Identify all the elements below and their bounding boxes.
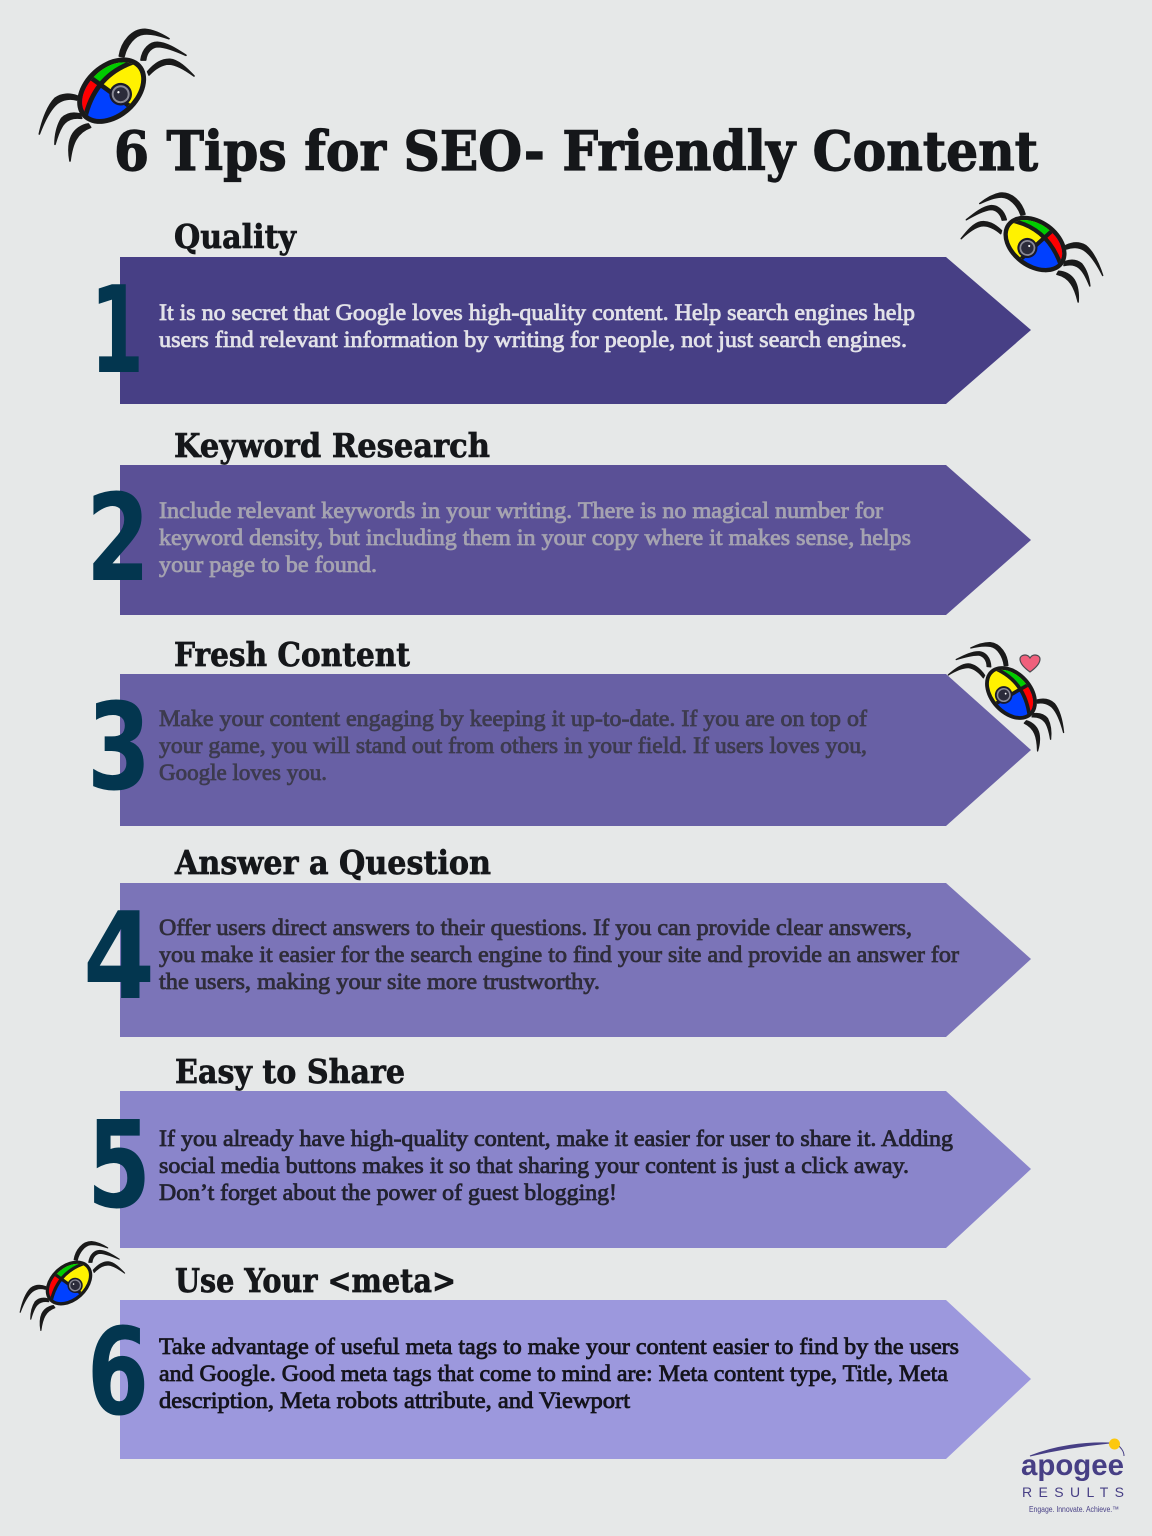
logo: apogee results: apogee (1021, 1449, 1124, 1482)
logo: apogee results: RESULTS (1022, 1484, 1124, 1500)
panel 4: Answer a Question (83, 883, 1031, 1037)
panel 1: Quality: It is no secret that Google loves high-quality content. Help search engines help (159, 300, 915, 326)
heading: Keyword Research: Keyword Research (174, 426, 490, 465)
panel 6: Use Your meta: and Google. Good meta tags that come to mind are: Meta content type, Title, Meta (159, 1361, 949, 1387)
panel 3: Fresh Content: Google loves you. (159, 760, 327, 786)
panel 4: Answer a Question: Offer users direct answers to their questions. If you can provide clear answers, (159, 915, 912, 941)
panel 6: Use Your meta: description, Meta robots attribute, and Viewport (159, 1388, 630, 1414)
heading: Quality: Quality (174, 217, 297, 256)
panel 4: Answer a Question: the users, making your site more trustworthy. (159, 969, 600, 995)
icon: spider bug top left (39, 29, 194, 161)
panel 1: Quality: users find relevant information by writing for people, not just search engines. (159, 327, 907, 353)
panel 3: Fresh Content: Make your content engaging by keeping it up-to-date. If you are on top of (159, 706, 867, 732)
panel 6: Use Your meta (87, 1300, 1031, 1459)
heading: Answer a Question: Answer a Question (174, 843, 491, 882)
heading: Use Your meta: Use Your <meta> (175, 1261, 456, 1300)
icon: spider bug top right (957, 183, 1105, 314)
panel 2: Keyword Research: 2 (86, 470, 150, 609)
panel 3: Fresh Content (87, 674, 1031, 826)
logo: apogee results (1021, 1438, 1124, 1514)
icon: spider bug lower left (20, 1242, 125, 1330)
panel 1: Quality: 1 (90, 262, 144, 401)
panel 5: Easy to Share: 5 (87, 1097, 151, 1236)
heading: Fresh Content: Fresh Content (174, 635, 411, 674)
icon: spider bug with heart (941, 639, 1072, 753)
panel 5: Easy to Share: If you already have high-quality content, make it easier for user to share it. Adding (159, 1126, 953, 1152)
logo: apogee results: Engage. Innovate. Achieve.™ (1029, 1505, 1119, 1514)
panel 5: Easy to Share: social media buttons makes it so that sharing your content is just a click away. (159, 1153, 909, 1179)
panel 3: Fresh Content: 3 (87, 679, 151, 818)
title: 6 Tips for SEO- Friendly Content (114, 119, 1038, 183)
panel 4: Answer a Question: you make it easier for the search engine to find your site and provide an answer for (159, 942, 959, 968)
panel 6: Use Your meta: Take advantage of useful meta tags to make your content easier to find by the users (159, 1334, 959, 1360)
panel 2: Keyword Research: keyword density, but including them in your copy where it makes sense, helps (159, 525, 911, 551)
panel 2: Keyword Research: Include relevant keywords in your writing. There is no magical number for (159, 498, 883, 524)
panel 2: Keyword Research (86, 465, 1031, 615)
panel 5: Easy to Share (87, 1091, 1031, 1248)
panel 3: Fresh Content: your game, you will stand out from others in your field. If users loves you, (159, 733, 867, 759)
panel 1: Quality (90, 257, 1031, 404)
panel 4: Answer a Question: 4 (83, 888, 155, 1027)
panel 5: Easy to Share: Don’t forget about the power of guest blogging! (159, 1180, 617, 1206)
heading: Easy to Share: Easy to Share (175, 1052, 405, 1091)
panel 6: Use Your meta: 6 (87, 1304, 149, 1443)
panel 2: Keyword Research: your page to be found. (159, 552, 377, 578)
